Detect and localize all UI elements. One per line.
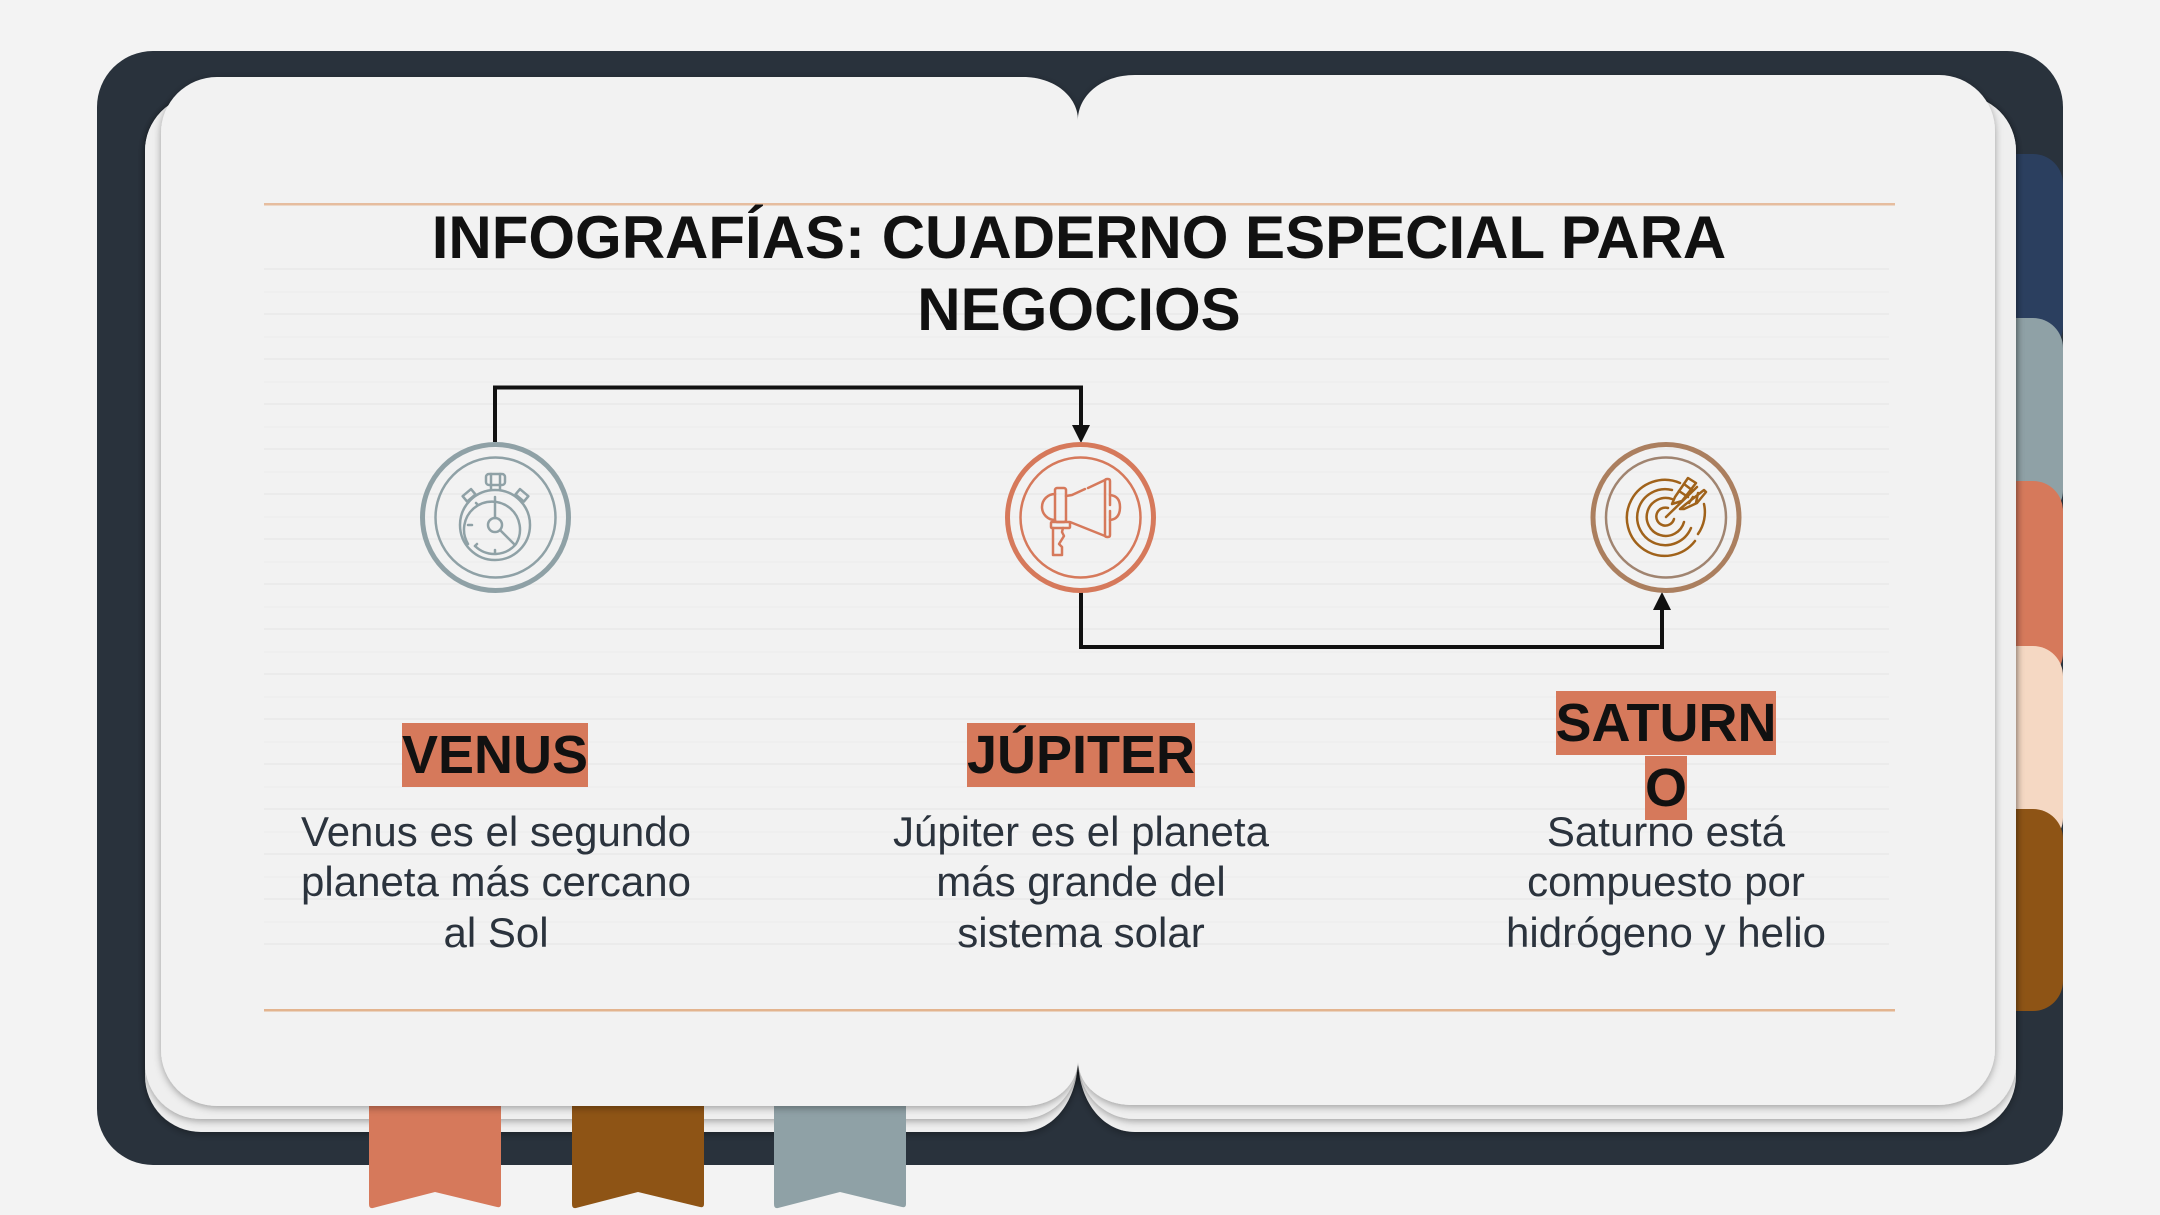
text: Venus	[301, 808, 691, 956]
connector: Venus to Júpiter	[495, 388, 1090, 443]
text: Saturno	[1506, 808, 1826, 956]
heading: Júpiter: JÚPITER	[967, 725, 1195, 785]
bookmark: gray	[774, 1100, 906, 1208]
tab: coral	[2016, 481, 2063, 683]
text: Júpiter: sistema solar	[957, 909, 1205, 956]
bookmark: brown	[572, 1100, 704, 1208]
tab: gray	[2016, 318, 2063, 520]
tab: brown	[2016, 809, 2063, 1011]
ruled lines	[264, 269, 1889, 944]
icon: target	[1593, 444, 1739, 590]
title: NEGOCIOS	[917, 276, 1241, 343]
front page	[161, 75, 1995, 1106]
bottom rule	[264, 1009, 1895, 1012]
middle page	[145, 95, 2016, 1119]
text: Venus: Venus es el segundo	[301, 808, 691, 855]
heading: Venus: VENUS	[402, 725, 588, 785]
tab: peach	[2016, 646, 2063, 848]
connector: Júpiter to Saturno	[1081, 592, 1671, 647]
heading: Saturno	[1556, 691, 1776, 820]
text: Saturno: Saturno está	[1547, 808, 1785, 855]
title	[432, 204, 1726, 343]
text: Júpiter: más grande del	[936, 858, 1226, 905]
text: Venus: al Sol	[443, 909, 549, 956]
text: Saturno: hidrógeno y helio	[1506, 909, 1826, 956]
heading: Saturno: O	[1645, 758, 1687, 818]
icon: stopwatch	[422, 444, 568, 590]
top rule	[264, 203, 1895, 206]
bookmark: coral	[369, 1100, 501, 1208]
title: INFOGRAFÍAS: CUADERNO ESPECIAL PARA	[432, 204, 1726, 271]
back page	[145, 95, 2016, 1132]
text: Saturno: compuesto por	[1527, 858, 1805, 905]
heading: Saturno: SATURN	[1556, 693, 1776, 753]
tab: navy	[2016, 154, 2063, 356]
text: Venus: planeta más cercano	[301, 858, 691, 905]
icon: megaphone	[1008, 444, 1154, 590]
text: Júpiter	[893, 808, 1269, 956]
text: Júpiter: Júpiter es el planeta	[893, 808, 1269, 855]
